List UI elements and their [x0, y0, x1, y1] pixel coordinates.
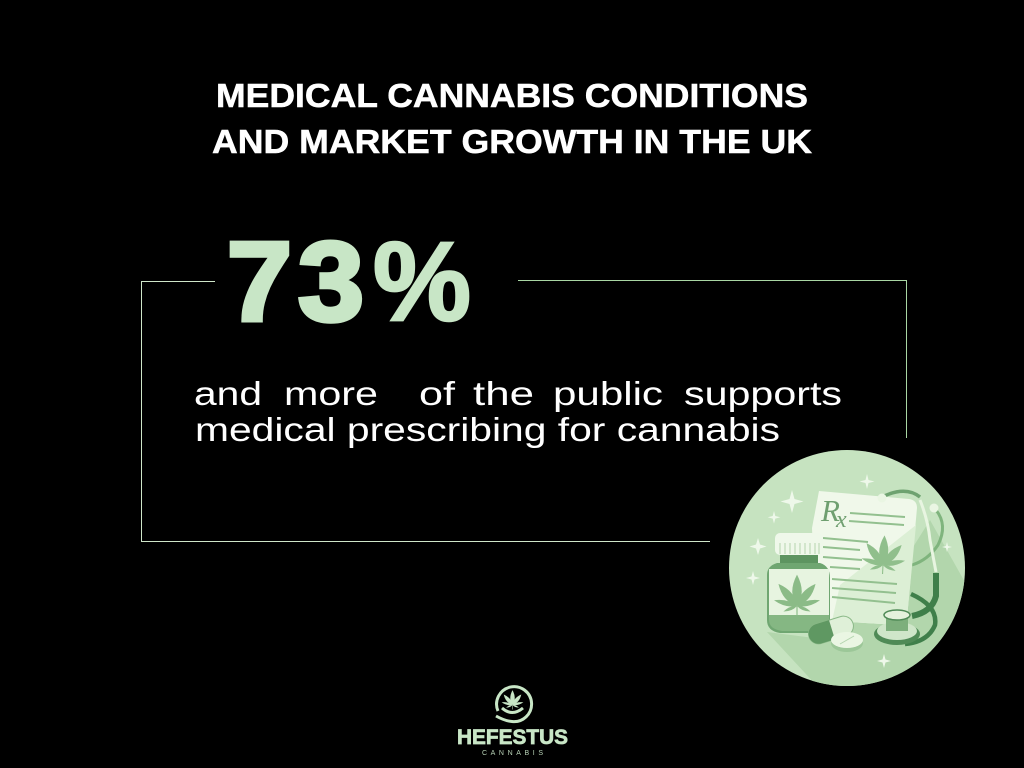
stethoscope back tube [912, 510, 943, 565]
statistic description: supports [684, 375, 842, 412]
prescription sheet [812, 491, 917, 625]
capsule [806, 614, 856, 646]
chest piece [874, 623, 920, 645]
bottle cap [775, 533, 823, 555]
statistic: 73%: 3 [298, 219, 364, 344]
statistic description: the [473, 375, 534, 412]
title: MEDICAL CANNABIS CONDITIONS [216, 77, 808, 114]
sheet lines [823, 513, 905, 603]
illustration background disc [729, 450, 965, 686]
title [212, 77, 812, 160]
statistic description [194, 375, 842, 448]
statistic description: more [284, 375, 378, 412]
statistic description: and [194, 375, 262, 412]
statistic description: medical prescribing for cannabis [195, 411, 780, 448]
logo: Hefestus Cannabis [457, 687, 568, 757]
Rx mark: x [835, 507, 847, 533]
stethoscope [874, 491, 938, 645]
frame around statistic [142, 280, 906, 542]
sheet leaf [860, 534, 907, 575]
statistic description: of [419, 375, 456, 412]
tablet [831, 632, 863, 652]
logo emblem [496, 687, 532, 722]
sparkles [746, 474, 952, 668]
Rx mark: R [821, 493, 840, 528]
illustration: medicine, prescription and stethoscope [729, 450, 975, 700]
statistic description: public [553, 375, 663, 412]
medicine bottle [767, 533, 830, 633]
statistic: 73%: 7 [227, 219, 292, 344]
logo subtitle: CANNABIS [482, 750, 543, 757]
logo wordmark: HEFESTUS [457, 726, 568, 749]
title: AND MARKET GROWTH IN THE UK [212, 123, 812, 160]
statistic: 73% [227, 219, 471, 344]
statistic: 73%: % [373, 219, 471, 344]
bottle leaf [773, 575, 821, 616]
disc shading [767, 520, 964, 686]
